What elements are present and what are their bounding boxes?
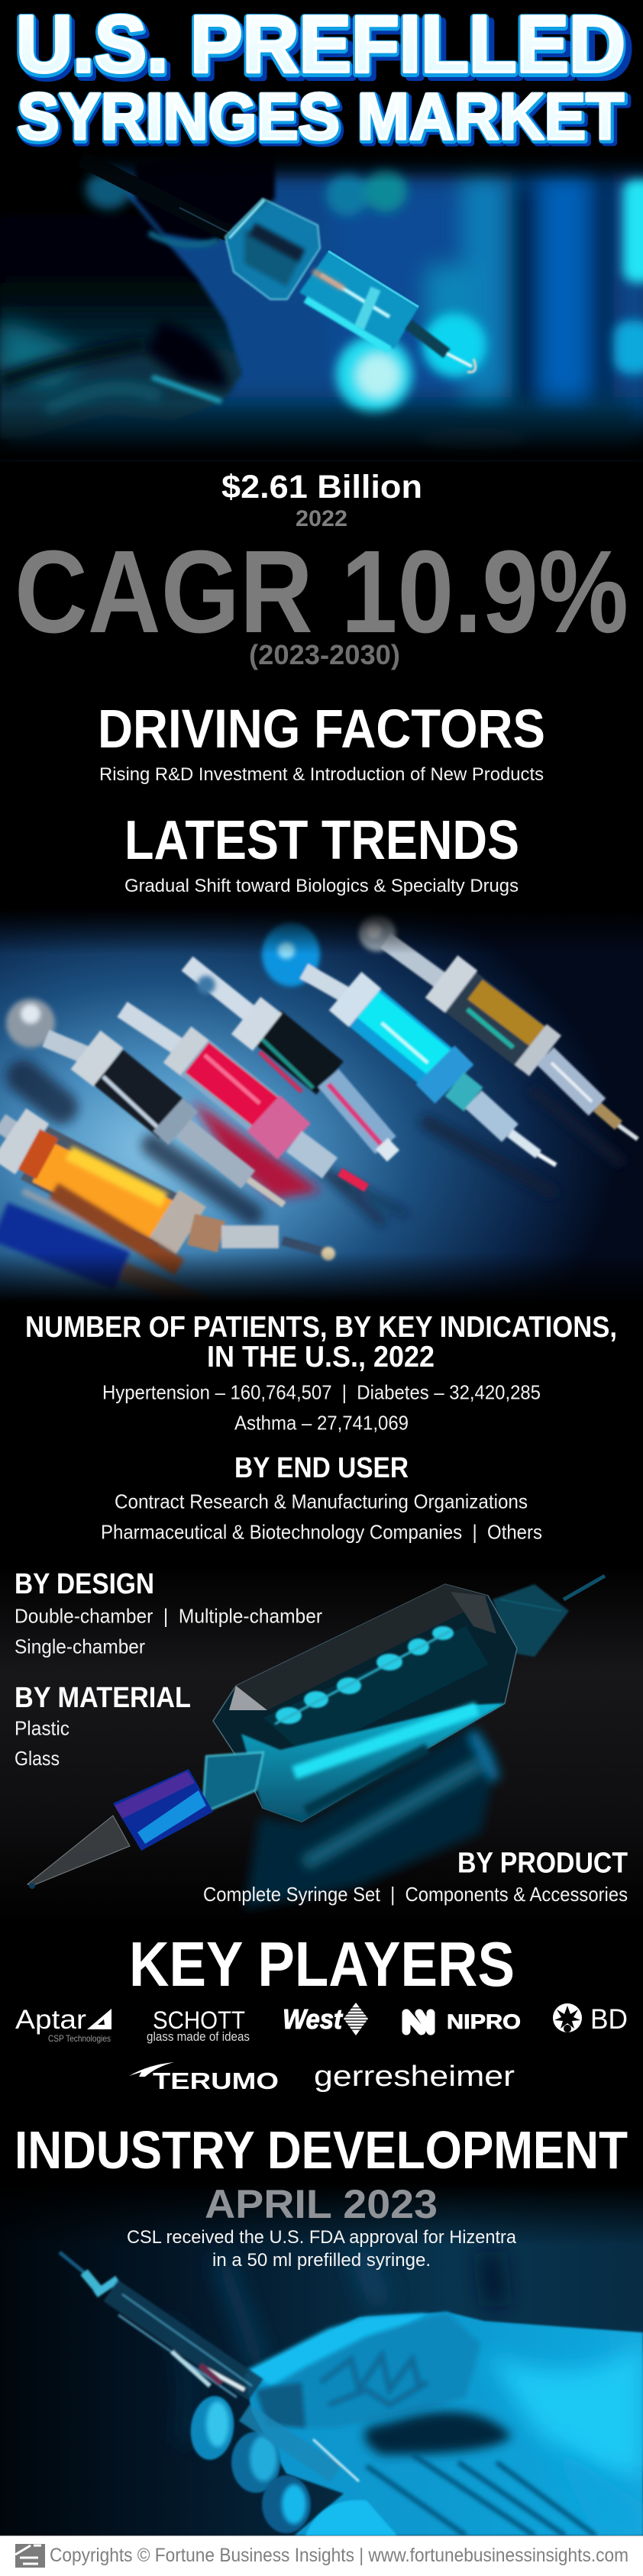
title line 2: SYRINGES MARKET [19,84,628,157]
top and bottom fades [0,141,643,460]
syringe [82,159,476,372]
hand silhouette [0,141,275,438]
logo: NIPRO: NIPRO [447,2010,521,2033]
chain inside bottle [275,1626,454,1724]
title line 1: U.S. PREFILLED [16,0,625,89]
top fade [0,2168,643,2245]
panel: patients by key indications [25,1311,617,1434]
logo: Aptar: Aptar [15,2005,86,2035]
material items: Glass [15,1747,60,1770]
syringe shadows [23,1077,619,1222]
syringe: red [122,1009,367,1188]
development date: APRIL 2023 [205,2182,438,2227]
logo: SCHOTT [147,2006,250,2044]
patient counts: Hypertension – 160,764,507 | Diabetes – 32,420,285 [102,1380,541,1403]
patient counts [102,1380,541,1434]
end user items: Pharmaceutical & Biotechnology Companies | Others [101,1521,542,1544]
logo: West: West [283,2003,344,2035]
heading: latest trends: LATEST TRENDS [124,810,519,871]
end user items [101,1490,542,1544]
logo: Terumo [129,2062,279,2094]
red reflection [191,1099,321,1199]
logo: BD: BD [590,2003,628,2035]
heading: key players: KEY PLAYERS [129,1929,515,2000]
heading: patients: IN THE U.S., 2022 [207,1341,435,1374]
title line 1: U.S. PREFILLED [19,5,632,95]
syringe: dark clear [6,999,284,1205]
panel: by material [15,1682,191,1770]
market size value: $2.61 Billion [221,469,422,505]
neck and blue chamber [113,1752,263,1851]
logo: Aptar: CSP Technologies [48,2033,111,2044]
title line 2: SYRINGES MARKET [18,80,624,153]
footer bar [0,2536,643,2576]
panel: bottom photo of gloved hand holding syringe [0,2168,643,2536]
heading: by end user: BY END USER [234,1452,409,1484]
development text: in a 50 ml prefilled syringe. [212,2250,431,2271]
driving factors text: Rising R&D Investment & Introduction of New Products [99,764,544,785]
syringe: orange [0,1122,335,1261]
logo: Gerresheimer: gerresheimer [314,2061,515,2093]
title [16,0,632,157]
development text: CSL received the U.S. FDA approval for Hizentra [127,2227,517,2248]
needle and cap [493,1576,605,1657]
glove [244,2312,643,2536]
heading: patients [25,1311,617,1374]
design items [15,1605,322,1658]
bottle body [213,1584,517,1822]
logo: BD [553,2003,628,2035]
panel: bottle syringe photo [0,1565,643,1924]
CAGR period: (2023-2030) [249,639,400,670]
top and bottom fades [0,909,643,1314]
heading: by material: BY MATERIAL [15,1682,191,1714]
panel: hero photo of glowing syringe held in a hand [0,141,643,460]
end user items: Contract Research & Manufacturing Organizations [115,1490,528,1513]
development text [127,2227,517,2271]
logo: SCHOTT: glass made of ideas [147,2029,250,2044]
syringe: blurred navy [0,1191,206,1306]
panel: by design [15,1568,322,1658]
design items: Double-chamber | Multiple-chamber [15,1605,322,1628]
cone tip [27,1816,130,1889]
panel: by end user [101,1452,542,1544]
fabric folds [168,2252,496,2443]
panel: photo of colourful syringes [0,909,643,1314]
panel: by product [203,1848,628,1906]
market size year: 2022 [296,506,347,531]
heading: by design: BY DESIGN [15,1568,154,1600]
syringe [60,2252,359,2481]
latest trends text: Gradual Shift toward Biologics & Specialty Drugs [124,876,519,896]
logo: Aptar [15,2005,111,2044]
logo: NIPRO [406,2010,521,2033]
fingers [186,2394,397,2536]
logos: key players [15,2003,628,2094]
reflection [244,1725,496,1909]
title line 2: SYRINGES MARKET [18,82,625,155]
patient counts: Asthma – 27,741,069 [234,1411,409,1434]
syringe: cyan [262,922,556,1165]
title line 1: U.S. PREFILLED [16,1,625,91]
syringe: gold [359,915,638,1139]
icon: Fortune Business Insights logo [15,2544,45,2568]
logo: Terumo: TERUMO [153,2068,279,2094]
heading: driving factors: DRIVING FACTORS [98,699,545,760]
design items: Single-chamber [15,1635,145,1658]
logo: SCHOTT: SCHOTT [153,2006,245,2034]
material items [15,1716,69,1770]
material items: Plastic [15,1716,69,1739]
syringe: clear with pink [187,964,393,1156]
